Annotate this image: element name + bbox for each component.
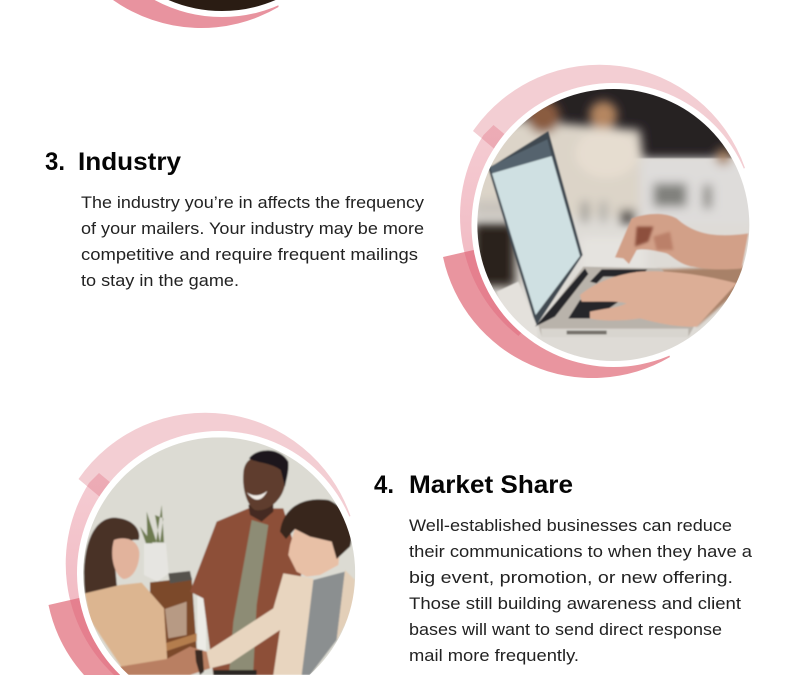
lower hand — [580, 271, 737, 327]
plant and vase — [140, 505, 169, 582]
section 3 heading: 3. — [45, 148, 65, 176]
section 3 heading: Industry — [78, 148, 181, 176]
section 3 body text: competitive and require frequent mailings — [81, 246, 418, 264]
hinge — [535, 268, 588, 327]
section 4 photo: colleagues shaking hands — [80, 435, 360, 675]
section 4 heading: 4. — [374, 471, 394, 499]
section 4 body text: Well-established businesses can reduce — [409, 517, 732, 535]
bookshelf — [150, 571, 206, 667]
laptop base — [538, 267, 707, 337]
section 4: market share — [48, 413, 753, 675]
keyboard — [590, 269, 647, 283]
upper hand — [615, 214, 748, 269]
section 4 body text: Those still building awareness and client — [409, 595, 741, 613]
section 4 body text: their communications to when they have a — [409, 543, 753, 561]
section 4 body text: big event, promotion, or new offering. — [409, 569, 733, 587]
section 4 body text: bases will want to send direct response — [409, 621, 722, 639]
man — [190, 450, 302, 675]
section 3 body text: The industry you’re in affects the frequency — [81, 194, 425, 212]
section 3 body text: of your mailers. Your industry may be more — [81, 220, 424, 238]
section 3 body text — [81, 194, 425, 290]
wood surface — [657, 267, 748, 327]
section 4 body text: mail more frequently. — [409, 647, 579, 665]
section 3 body text: to stay in the game. — [81, 272, 239, 290]
right woman — [207, 499, 355, 675]
laptop lid — [488, 131, 583, 325]
section 3 pink arc frame — [443, 65, 756, 378]
section 4 pink arc frame — [48, 413, 361, 675]
section 3 photo: hands typing on laptop — [473, 83, 757, 367]
handshake — [120, 647, 210, 675]
section 4 heading: Market Share — [409, 471, 573, 499]
desk — [496, 282, 522, 297]
left woman — [84, 518, 167, 670]
section 3: industry — [45, 65, 757, 378]
section 4 body text — [409, 517, 753, 665]
section 2 circle remnant at top — [113, 0, 289, 28]
